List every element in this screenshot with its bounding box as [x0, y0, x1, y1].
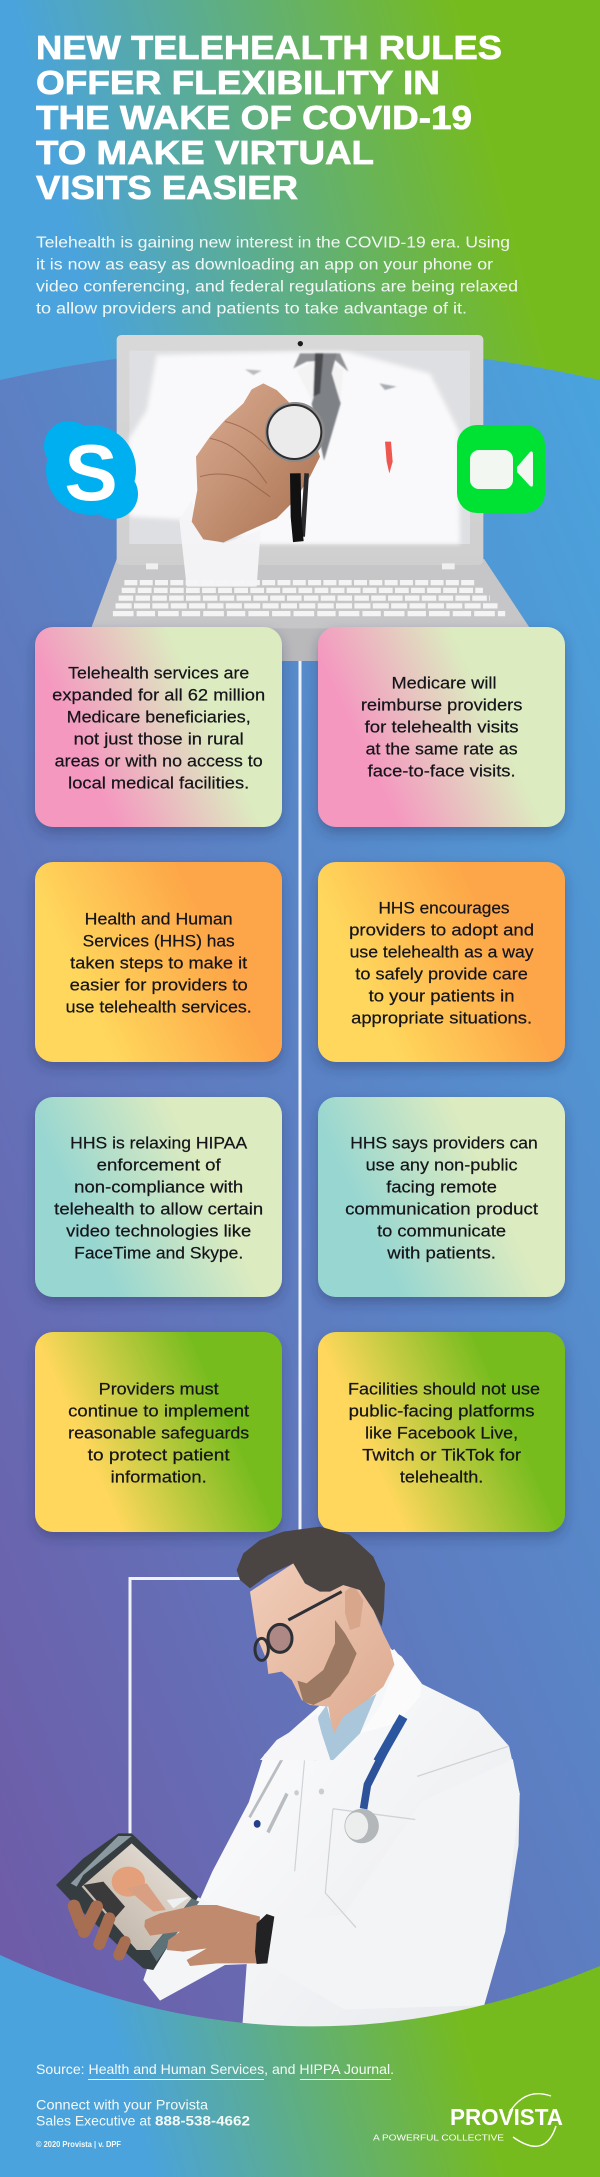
card 2: for telehealth visits	[365, 717, 519, 736]
intro text: it is now as easy as downloading an app on your phone or	[36, 256, 493, 274]
title	[36, 30, 502, 207]
card 4: use telehealth as a way	[350, 942, 534, 961]
coat sleeve	[270, 1759, 520, 2010]
title: OFFER FLEXIBILITY IN	[36, 65, 440, 102]
card 7: continue to implement	[68, 1401, 249, 1420]
card 5	[35, 1097, 282, 1297]
wristband	[255, 1914, 274, 1964]
background: top gradient	[0, 0, 600, 700]
card 2	[318, 627, 565, 827]
card 6: with patients.	[386, 1243, 496, 1262]
collar	[360, 1648, 422, 1733]
background: middle curved panel	[0, 346, 600, 2060]
ear	[345, 1585, 363, 1630]
left lapel	[260, 1714, 331, 1761]
title: NEW TELEHEALTH RULES	[36, 30, 502, 67]
card 4: providers to adopt and	[349, 920, 534, 939]
contact text: Connect with your Provista	[36, 2096, 208, 2112]
tablet frame edge	[150, 1898, 199, 1962]
laptop camera	[298, 341, 303, 346]
intro text: Telehealth is gaining new interest in the COVID-19 era. Using	[36, 234, 510, 252]
card 6: facing remote	[386, 1177, 497, 1196]
card 6	[318, 1097, 565, 1297]
card 1: local medical facilities.	[68, 773, 249, 792]
coat	[199, 1649, 520, 2044]
card 7	[35, 1332, 282, 1532]
icon: facetime	[457, 425, 545, 513]
stethoscope	[265, 402, 325, 542]
icon: skype: S	[64, 428, 118, 517]
logo: provista: A POWERFUL COLLECTIVE	[373, 2132, 504, 2142]
card 3	[35, 862, 282, 1062]
coat fold lines	[295, 1742, 509, 1927]
connector: centre line	[298, 661, 302, 1536]
tablet and hands	[56, 1833, 274, 2001]
logo: provista	[373, 2094, 563, 2146]
source line: Source: Health and Human Services, and HIPPA Journal.	[36, 2061, 394, 2077]
connector: line to tablet	[130, 1578, 240, 1835]
card 4: HHS encourages	[378, 898, 510, 917]
contact text: Sales Executive at	[36, 2112, 151, 2128]
card 5: telehealth to allow certain	[54, 1199, 263, 1218]
card 1: not just those in rural	[74, 729, 244, 748]
hair	[237, 1527, 385, 1627]
intro text	[36, 234, 518, 318]
title: VISITS EASIER	[36, 170, 298, 207]
card 2: Medicare will	[392, 673, 496, 692]
card 8: Twitch or TikTok for	[362, 1445, 521, 1464]
shirt	[314, 1693, 377, 1761]
tablet dark reflection	[83, 1882, 125, 1920]
card 2: face-to-face visits.	[368, 761, 516, 780]
card 5: HHS is relaxing HIPAA	[70, 1133, 248, 1152]
coat on screen	[128, 352, 460, 544]
card 3: easier for providers to	[70, 975, 248, 994]
right hand	[144, 1905, 260, 1966]
copyright: © 2020 Provista | v. DPF	[36, 2140, 121, 2149]
card 3: Health and Human	[85, 909, 233, 928]
laptop base lower strip	[80, 627, 545, 661]
title: THE WAKE OF COVID-19	[36, 100, 472, 137]
card 4	[318, 862, 565, 1062]
card 8: Facilities should not use	[348, 1379, 540, 1398]
contact text: 888-538-4662	[155, 2112, 250, 2128]
sleeve	[179, 500, 261, 587]
lanyard	[378, 1717, 403, 1762]
card 7: Providers must	[99, 1379, 219, 1398]
intro text: to allow providers and patients to take advantage of it.	[36, 300, 467, 318]
card 8	[318, 1332, 565, 1532]
card 5: FaceTime and Skype.	[74, 1243, 243, 1262]
shirt and tie	[245, 353, 397, 461]
card 4: to safely provide care	[355, 964, 528, 983]
hand	[192, 383, 320, 542]
glasses	[255, 1592, 342, 1660]
card 1: Medicare beneficiaries,	[67, 707, 251, 726]
card 5: enforcement of	[97, 1155, 221, 1174]
card 1	[35, 627, 282, 827]
tablet screen	[82, 1843, 192, 1950]
screen	[129, 351, 470, 544]
title: TO MAKE VIRTUAL	[36, 135, 374, 172]
card 5: non-compliance with	[74, 1177, 243, 1196]
illustration: doctor with tablet	[56, 1527, 520, 2044]
icon: skype	[44, 421, 138, 519]
card 3: Services (HHS) has	[83, 931, 235, 950]
card 3: use telehealth services.	[66, 997, 252, 1016]
doctor head	[237, 1527, 422, 1762]
contact text	[36, 2096, 250, 2128]
card 5: video technologies like	[66, 1221, 251, 1240]
card 7: reasonable safeguards	[68, 1423, 249, 1442]
card 8: public-facing platforms	[349, 1401, 535, 1420]
beard	[297, 1620, 357, 1705]
left sleeve cuff	[143, 1897, 263, 2001]
card 6: HHS says providers can	[350, 1133, 538, 1152]
card 6: to communicate	[377, 1221, 506, 1240]
caller on tablet	[112, 1867, 190, 1912]
card 6: communication product	[345, 1199, 538, 1218]
left hand fingers	[74, 1906, 125, 1955]
stethoscope tubes	[250, 1720, 400, 1832]
card 3: taken steps to make it	[70, 953, 247, 972]
card 6: use any non-public	[366, 1155, 518, 1174]
purple gap correction: none needed; tablet body	[56, 1833, 198, 1970]
intro text: video conferencing, and federal regulations are being relaxed	[36, 278, 518, 296]
card 2: at the same rate as	[366, 739, 518, 758]
card 1: areas or with no access to	[55, 751, 263, 770]
stethoscope chest piece	[254, 1788, 379, 1843]
finger lines	[200, 422, 270, 497]
card 7: to protect patient	[88, 1445, 230, 1464]
card 2: reimburse providers	[361, 695, 522, 714]
laptop lid and screen photo	[117, 335, 483, 587]
card 7: information.	[111, 1467, 207, 1486]
logo: provista: PROVISTA	[450, 2104, 563, 2130]
card 4: to your patients in	[369, 986, 515, 1005]
card 4: appropriate situations.	[351, 1008, 532, 1027]
card 1: Telehealth services are	[68, 663, 249, 682]
pen	[385, 442, 393, 473]
background: bottom curved panel	[0, 1955, 600, 2177]
tablet cover	[71, 1836, 132, 1887]
card 8: telehealth.	[400, 1467, 483, 1486]
neck and face	[250, 1563, 397, 1737]
laptop base and keyboard	[91, 559, 530, 628]
illustration: laptop with doctor on screen	[80, 335, 545, 661]
card 8: like Facebook Live,	[365, 1423, 518, 1442]
card 1: expanded for all 62 million	[52, 685, 265, 704]
doctor torso	[199, 1649, 520, 2044]
